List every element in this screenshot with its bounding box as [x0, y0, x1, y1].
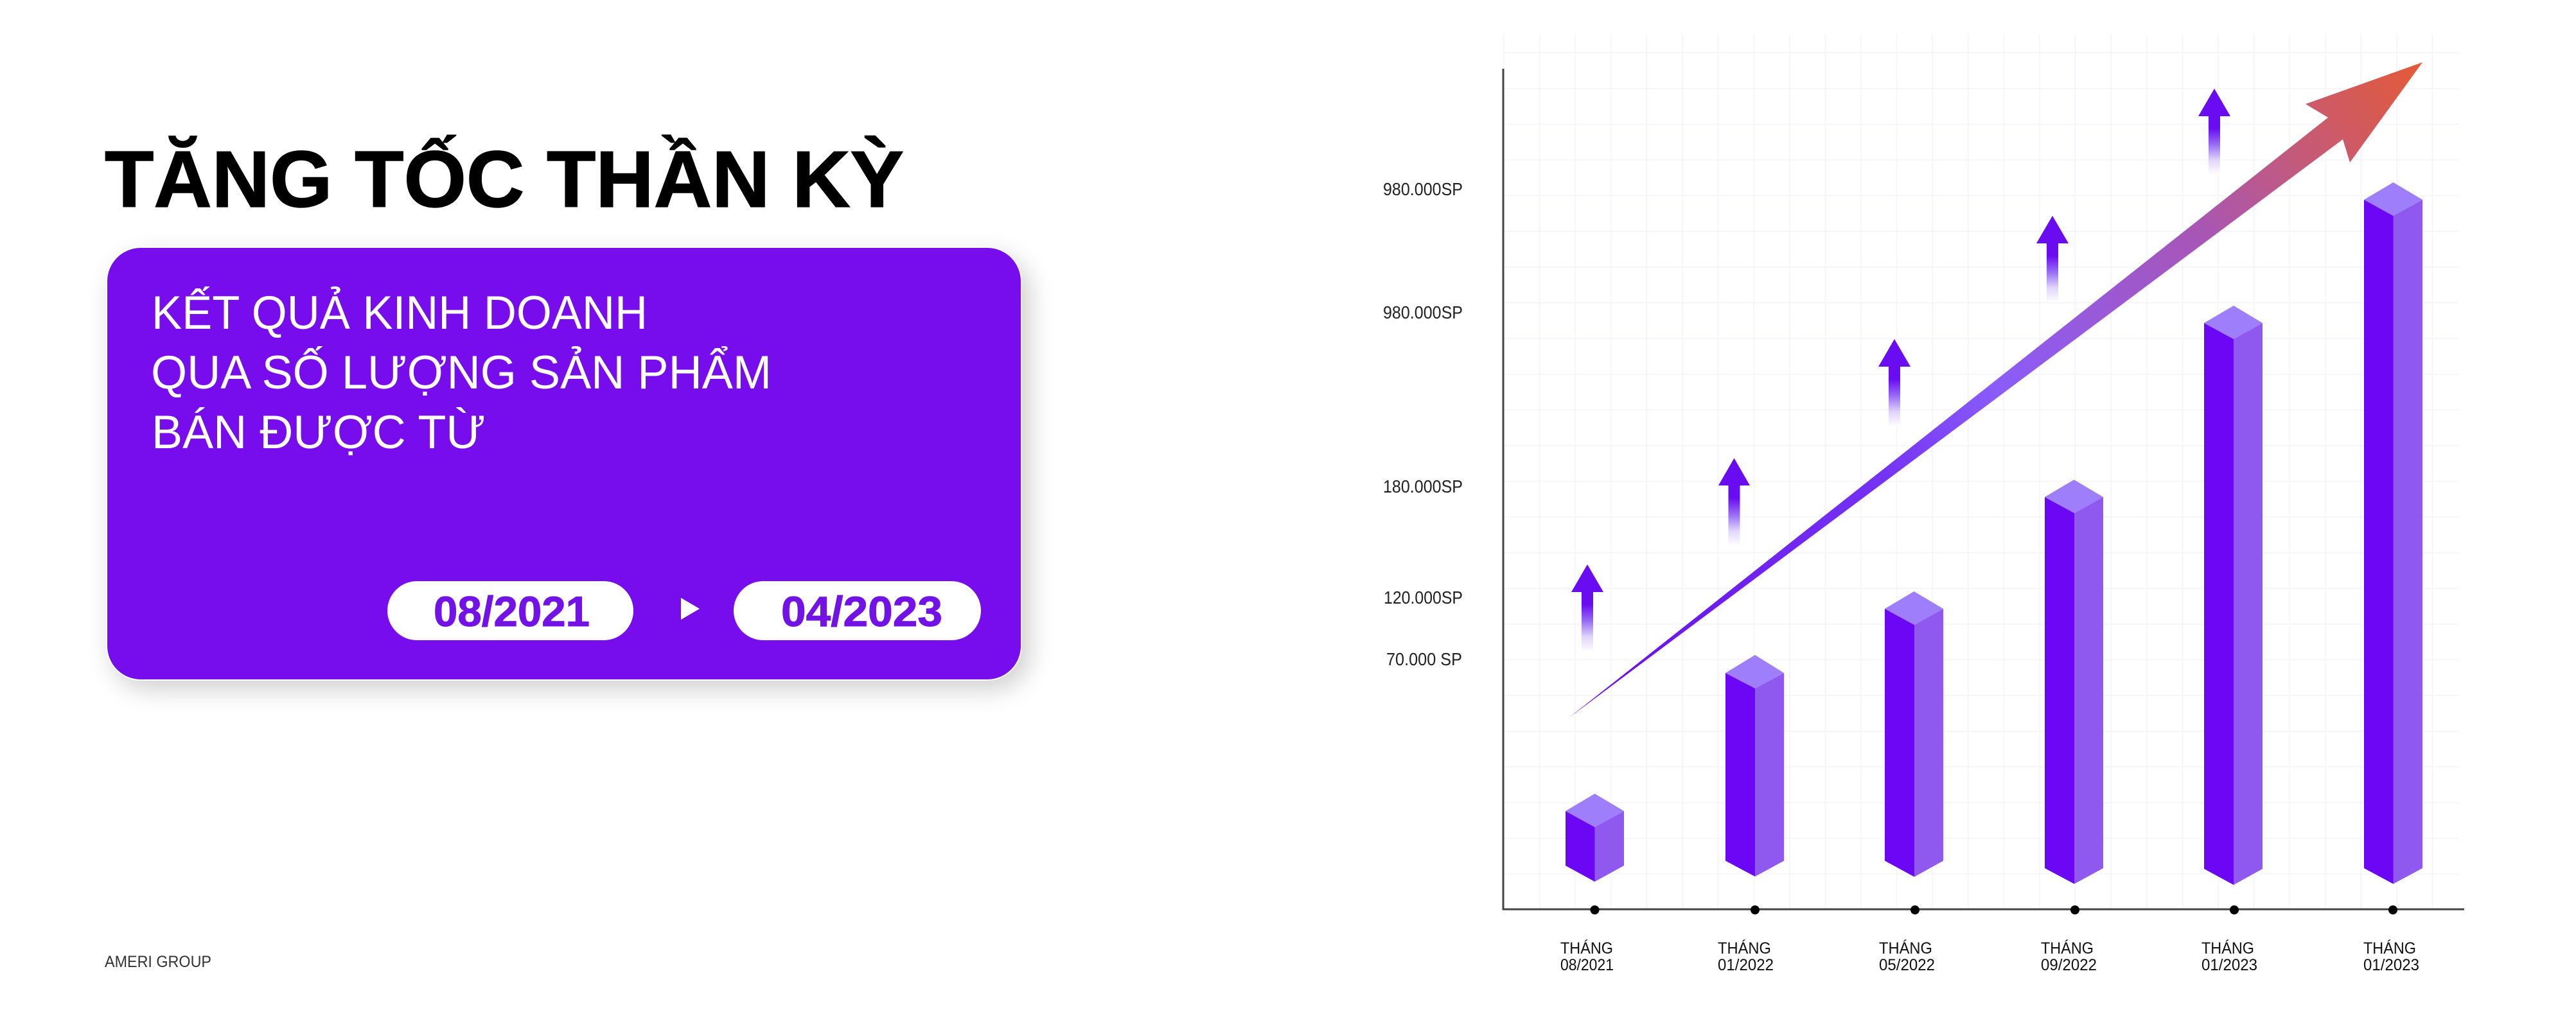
x axis labels: 01/2022 — [1718, 956, 1774, 974]
card subtitle — [151, 287, 772, 458]
arrow: small up arrow 4 — [2036, 216, 2069, 302]
bar 05/2022 — [1885, 591, 1943, 877]
card subtitle: BÁN ĐƯỢC TỪ — [152, 406, 486, 458]
x axis labels — [1560, 939, 2419, 974]
x axis labels: THÁNG — [2363, 939, 2416, 957]
end date pill: 04/2023 — [781, 588, 942, 635]
y axis labels: 70.000 SP — [1386, 649, 1462, 669]
arrow: small up arrow 1 — [1571, 564, 1603, 652]
y axis labels — [1383, 179, 1463, 669]
bar 01/2023 — [2204, 306, 2263, 885]
x axis dots — [1591, 905, 2397, 914]
x axis labels: THÁNG — [2041, 939, 2094, 957]
x axis labels: 09/2022 — [2041, 956, 2097, 974]
card subtitle: KẾT QUẢ KINH DOANH — [152, 287, 648, 339]
arrow: small up arrow 2 — [1718, 458, 1750, 546]
arrow: large growth trend arrow — [1569, 62, 2422, 718]
x axis labels: THÁNG — [2201, 939, 2254, 957]
x axis labels: THÁNG — [1718, 939, 1771, 957]
start date pill: 08/2021 — [434, 588, 590, 635]
icon: play arrow between dates — [681, 598, 700, 620]
x axis labels: 01/2023 — [2201, 956, 2257, 974]
footer brand: AMERI GROUP — [105, 953, 211, 971]
x axis labels: 01/2023 — [2363, 956, 2419, 974]
bar 09/2022 — [2045, 480, 2103, 884]
y axis labels: 980.000SP — [1383, 302, 1463, 322]
bar 08/2021 — [1566, 794, 1624, 882]
arrow: small up arrow 5 — [2198, 89, 2230, 175]
panel: purple results card — [106, 247, 1028, 688]
arrow: small up arrow 3 — [1878, 339, 1910, 427]
x axis — [1503, 908, 2464, 911]
x axis labels: 05/2022 — [1879, 956, 1935, 974]
start date pill — [387, 581, 633, 640]
y axis labels: 180.000SP — [1383, 476, 1463, 496]
bar 01/2023 last — [2364, 182, 2422, 884]
card subtitle: QUA SỐ LƯỢNG SẢN PHẨM — [151, 346, 772, 399]
end date pill — [734, 581, 981, 640]
x axis labels: 08/2021 — [1560, 956, 1614, 974]
y axis labels: 120.000SP — [1384, 588, 1463, 607]
y axis — [1502, 69, 1504, 910]
x axis labels: THÁNG — [1879, 939, 1932, 957]
y axis labels: 980.000SP — [1383, 179, 1463, 199]
bar 01/2022 — [1725, 655, 1784, 877]
x axis labels: THÁNG — [1560, 939, 1613, 957]
title: TĂNG TỐC THẦN KỲ — [105, 135, 904, 224]
bar chart — [1383, 34, 2464, 974]
